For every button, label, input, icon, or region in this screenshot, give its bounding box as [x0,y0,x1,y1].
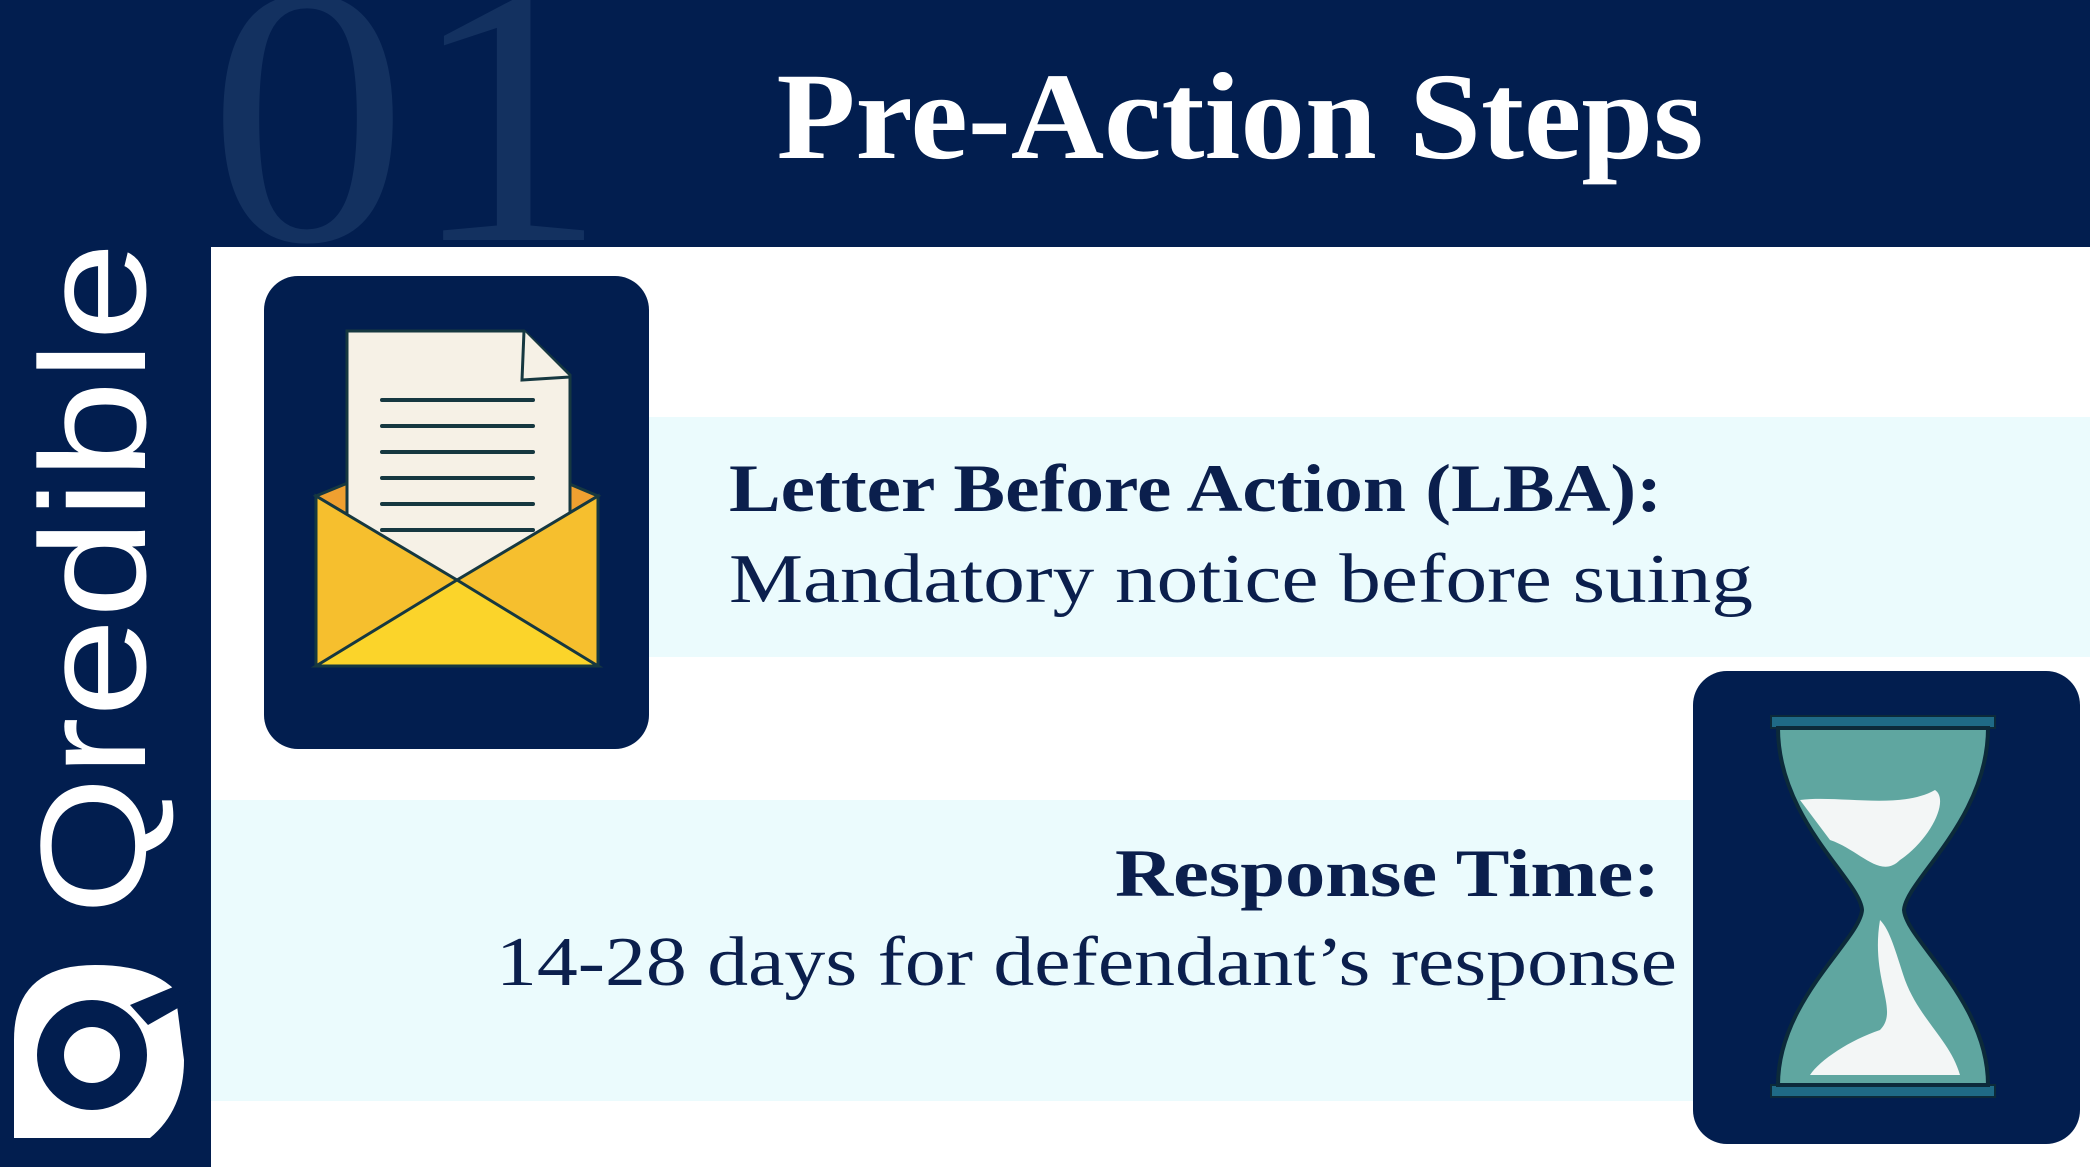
text block: LBA [729,450,1753,618]
icon: logo mark [14,965,192,1138]
logo: Qredible vertical: Qredible [9,242,177,915]
text block: response time [496,835,1677,1001]
icon box: hourglass [1693,671,2080,1144]
text block: response time: Response Time: [1115,835,1660,911]
logo: Qredible vertical [9,242,192,1138]
text block: response time: 14-28 days for defendant’s response [496,924,1677,1001]
light band 1 [649,417,2090,657]
text block: LBA: Letter Before Action (LBA): [729,450,1662,526]
light band 2 [211,800,1693,1101]
text block: LBA: Mandatory notice before suing [729,541,1753,618]
title: Pre-Action Steps [776,48,1704,185]
icon box: envelope [264,276,649,749]
